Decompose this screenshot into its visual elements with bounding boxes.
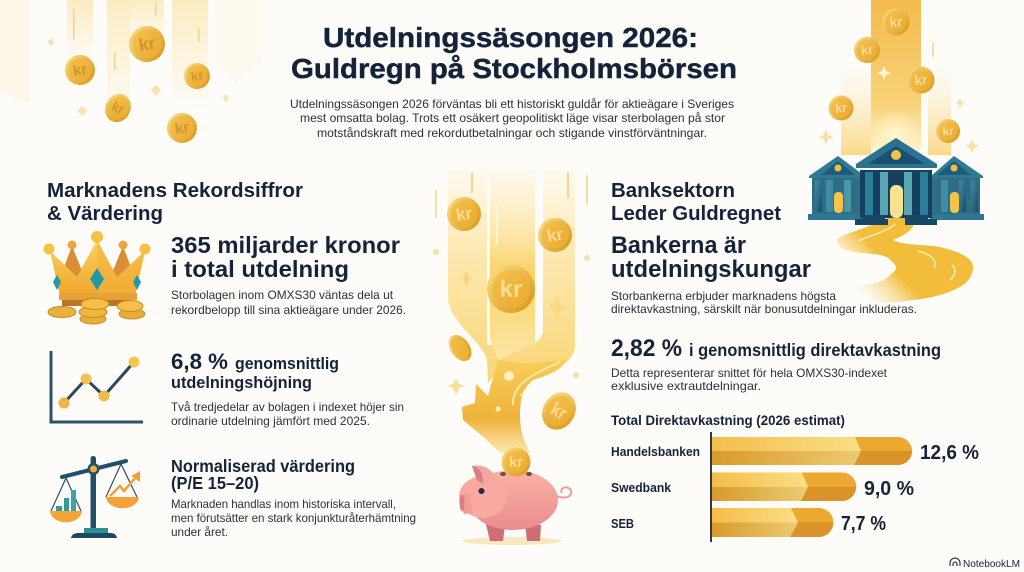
bar: SEB: SEB — [611, 516, 634, 531]
bar: SEB: 7,7 % — [841, 513, 886, 535]
coin — [906, 65, 936, 95]
bar: Swedbank: 9,0 % — [864, 478, 914, 500]
stat: total dividend: rekordbelopp till sina aktieägare under 2026. — [171, 303, 406, 317]
bar: Handelsbanken — [611, 437, 979, 465]
stat: average yield: 2,82 % — [611, 335, 682, 362]
coin — [444, 331, 476, 365]
stat: dividend increase: ordinarie utdelning jämfört med 2025. — [171, 414, 370, 428]
stat: dividend kings: utdelningskungar — [611, 256, 811, 283]
stat: dividend increase — [171, 349, 404, 428]
heading: market records — [47, 180, 303, 225]
stat: average yield — [611, 335, 941, 393]
right bank — [930, 156, 984, 220]
icon: line chart — [51, 351, 143, 422]
coin: kr — [190, 67, 204, 84]
coin — [853, 36, 881, 64]
title — [291, 22, 737, 84]
piggy bank — [459, 466, 571, 545]
heading: market records: & Värdering — [47, 203, 163, 225]
bar: SEB — [611, 508, 886, 537]
sparkles and droplets — [433, 172, 590, 395]
coin: kr — [914, 72, 929, 88]
coin — [827, 94, 855, 122]
stat: dividend kings: Bankerna är — [611, 232, 746, 259]
coin — [101, 90, 135, 126]
top-right illustration: bank buildings under gold rain — [808, 0, 984, 303]
stat: total dividend: i total utdelning — [171, 256, 349, 282]
coin — [535, 386, 583, 436]
stat: normalised valuation: men förutsätter en stark konjunkturåterhämtning — [171, 511, 416, 525]
coin: kr — [500, 276, 522, 303]
coin — [63, 53, 97, 87]
coin in slot — [502, 448, 530, 476]
stat: average yield: exklusive extrautdelningar. — [611, 379, 761, 393]
heading: market records: Marknadens Rekordsiffror — [47, 180, 303, 202]
right stream — [497, 170, 575, 362]
coin — [182, 61, 212, 91]
stat: total dividend: Storbolagen inom OMXS30 väntas dela ut — [171, 288, 394, 302]
heading: bank sector: Leder Guldregnet — [611, 203, 781, 225]
lower gold stream — [462, 360, 567, 453]
title: Guldregn på Stockholmsbörsen — [291, 53, 737, 84]
stat: dividend kings: direktavkastning, särskilt när bonusutdelningar inkluderas. — [611, 302, 917, 316]
bar chart: total yield — [611, 413, 979, 542]
intro text: mest omsatta bolag. Trots ett osäkert geopolitiskt läge visar sterbolagen på stor — [300, 111, 725, 125]
stat: normalised valuation: (P/E 15–20) — [171, 473, 259, 493]
golden road — [837, 217, 973, 303]
coin: kr — [889, 14, 904, 30]
bar: Swedbank: Swedbank — [611, 480, 672, 495]
heading: bank sector — [611, 180, 781, 225]
middle stream — [490, 170, 535, 365]
stat: normalised valuation: Marknaden handlas inom historiska intervall, — [171, 497, 396, 511]
coin — [881, 7, 911, 37]
coin: kr — [137, 33, 157, 55]
axis — [710, 432, 712, 542]
coin — [165, 111, 199, 145]
coin: kr — [942, 124, 955, 139]
coin — [444, 194, 484, 234]
stat: dividend increase: Två tredjedelar av bolagen i indexet höjer sin — [171, 400, 404, 414]
coin: kr — [174, 119, 191, 138]
stat: average yield: i genomsnittlig direktavkastning — [689, 340, 941, 360]
coin: kr — [860, 42, 874, 58]
coin: kr — [454, 203, 474, 225]
panel: market records — [44, 180, 416, 539]
stat: normalised valuation: Normaliserad värdering — [171, 456, 355, 476]
central bank — [855, 138, 937, 225]
bar: Swedbank — [611, 472, 914, 501]
stat: normalised valuation: under året. — [171, 525, 228, 539]
coin — [126, 23, 168, 65]
coin in slot: kr — [509, 455, 523, 471]
coin: kr — [547, 398, 571, 424]
stat: average yield: Detta representerar snittet för hela OMXS30-indexet — [611, 366, 888, 380]
top-left falling coins illustration — [0, 0, 262, 145]
bar: Handelsbanken: Handelsbanken — [611, 444, 700, 459]
stat: total dividend — [171, 232, 406, 317]
intro text: motståndskraft med rekordutbetalningar och stigande vinstförväntningar. — [317, 126, 707, 140]
stat: dividend kings — [611, 232, 917, 316]
stat: normalised valuation — [171, 456, 416, 539]
coin: kr — [72, 61, 89, 80]
bar: Handelsbanken: 12,6 % — [920, 442, 979, 464]
stat: dividend kings: Storbankerna erbjuder marknadens högsta — [611, 289, 836, 303]
center illustration: golden stream into piggy bank — [433, 170, 590, 545]
icon: crown with coins — [44, 231, 150, 324]
coin — [487, 265, 535, 313]
icon: balance scale — [50, 456, 140, 538]
coin: kr — [109, 98, 127, 118]
coin — [535, 215, 575, 255]
coin: kr — [835, 101, 848, 116]
intro text — [290, 97, 734, 140]
stat: dividend increase: utdelningshöjning — [171, 373, 312, 392]
footer: NotebookLM logo: NotebookLM — [963, 558, 1020, 570]
coin: kr — [545, 224, 565, 246]
title: Utdelningssäsongen 2026: — [323, 22, 698, 53]
stat: total dividend: 365 miljarder kronor — [171, 232, 400, 258]
stat: dividend increase: 6,8 % — [171, 349, 228, 374]
left stream — [448, 170, 535, 383]
stat: dividend increase: genomsnittlig — [235, 354, 339, 373]
coin — [935, 118, 961, 144]
heading: bank sector: Banksektorn — [611, 180, 735, 202]
chart title: Total Direktavkastning (2026 estimat) — [611, 413, 845, 428]
panel: bank sector — [611, 180, 979, 542]
intro text: Utdelningssäsongen 2026 förväntas bli ett historiskt guldår för aktieägare i Sveriges — [290, 97, 734, 111]
left bank — [808, 156, 866, 220]
